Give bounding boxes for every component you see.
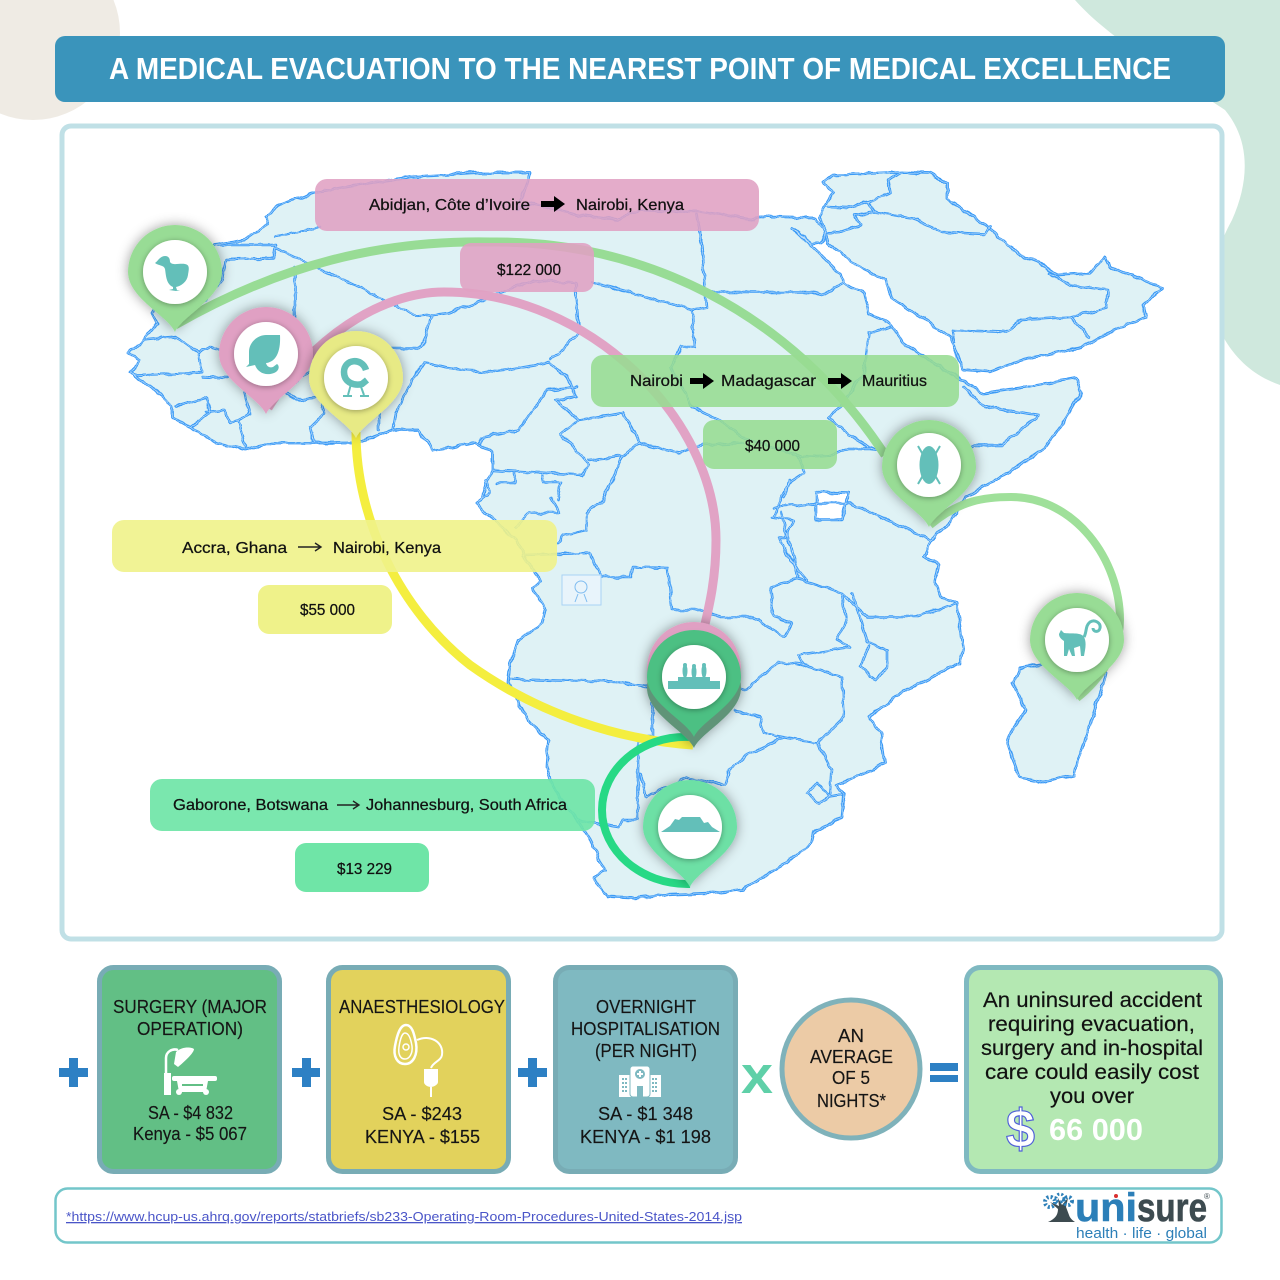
panel: total cost: surgery and in-hospital — [981, 1037, 1203, 1060]
footer panel — [56, 1186, 1222, 1242]
equals sign — [930, 1063, 958, 1082]
plus sign — [518, 1058, 547, 1087]
logo: unisure: sure — [1137, 1186, 1207, 1230]
panel: surgery: SURGERY (MAJOR — [113, 997, 267, 1017]
label: $122 000 — [460, 243, 594, 292]
label: $40 000 — [703, 420, 837, 469]
icon: elephant — [246, 335, 280, 374]
label: Accra route — [112, 520, 557, 572]
route arc: yellow Accra to Nairobi — [356, 432, 693, 745]
label: Gaborone route: Johannesburg, South Africa — [366, 797, 567, 814]
pin: table mountain — [643, 780, 737, 887]
pin: dodo — [128, 225, 222, 332]
icon: dodo — [155, 256, 189, 291]
route arc: green Gaborone to Johannesburg — [602, 737, 690, 884]
panel: surgery: SA - $4 832 — [148, 1103, 233, 1123]
panel: anaesthesiology: SA - $243 — [382, 1104, 462, 1124]
pin: shield beetle — [882, 420, 976, 527]
panel: overnight hospitalisation: SA - $1 348 — [598, 1104, 693, 1124]
panel: total cost: requiring evacuation, — [988, 1013, 1195, 1036]
map of Africa and Arabia — [129, 172, 1163, 898]
label: Nairobi Madagascar Mauritius route: Nairobi — [630, 373, 683, 390]
icon: shield — [918, 446, 940, 484]
panel: anaesthesiology: ANAESTHESIOLOGY — [339, 997, 505, 1017]
label: $55 000 — [258, 585, 392, 634]
panel: overnight hospitalisation: HOSPITALISATION — [571, 1019, 720, 1039]
label: Nairobi Madagascar Mauritius route — [591, 355, 959, 407]
decorative blob: top left — [0, 0, 120, 120]
label: Gaborone route: Gaborone, Botswana — [173, 797, 328, 814]
panel: surgery: OPERATION) — [137, 1019, 243, 1039]
icon: monument — [668, 663, 720, 689]
panel: surgery: Kenya - $5 067 — [133, 1124, 247, 1144]
logo: unisure: ® — [1204, 1192, 1210, 1201]
logo: unisure — [1045, 1186, 1210, 1242]
label: $13 229 — [295, 843, 429, 892]
total amount: 66 000 — [1049, 1112, 1143, 1147]
label: $13 229: $13 229 — [337, 861, 392, 878]
panel: total cost: care could easily cost — [985, 1061, 1199, 1084]
panel: overnight hospitalisation: KENYA - $1 198 — [580, 1127, 711, 1147]
panel: total cost: you over — [1050, 1085, 1134, 1108]
pin: elephant — [219, 307, 313, 414]
label: Abidjan route: Abidjan, Côte d’Ivoire — [369, 197, 530, 214]
pin: sankofa bird — [309, 331, 403, 438]
icon: anaesthesia mask — [394, 1025, 442, 1097]
icon: tree — [1045, 1194, 1075, 1222]
label: $40 000: $40 000 — [745, 438, 800, 455]
label: Nairobi Madagascar Mauritius route: Mauritius — [862, 373, 927, 390]
label: Nairobi Madagascar Mauritius route: Madagascar — [721, 373, 817, 390]
plus sign — [292, 1058, 320, 1087]
label: Abidjan route: Nairobi, Kenya — [576, 197, 684, 214]
icon: sankofa bird — [343, 361, 369, 396]
circle: average of 5 nights: AN — [838, 1026, 864, 1046]
panel: overnight hospitalisation: OVERNIGHT — [596, 997, 696, 1017]
title banner — [55, 36, 1225, 102]
icon: lemur — [1059, 621, 1100, 656]
logo: unisure: health · life · global — [1076, 1225, 1207, 1242]
route arc: green Nairobi to Madagascar — [175, 242, 885, 455]
circle: average of 5 nights: AVERAGE — [810, 1047, 893, 1067]
logo: unisure: uni — [1075, 1186, 1137, 1230]
panel: map — [62, 126, 1222, 939]
faint bird icon box — [562, 575, 601, 605]
plus sign — [59, 1058, 88, 1087]
icon: dollar: $ — [1006, 1099, 1035, 1159]
arrow — [828, 373, 852, 389]
label: Accra route: Accra, Ghana — [182, 540, 287, 557]
panel: anaesthesiology: KENYA - $155 — [365, 1127, 480, 1147]
circle: average of 5 nights: OF 5 — [832, 1068, 870, 1088]
circle: average of 5 nights: NIGHTS* — [817, 1091, 886, 1111]
pin: lemur — [1030, 593, 1124, 700]
circle: average of 5 nights — [782, 1000, 920, 1138]
route arc: green Madagascar to Mauritius — [930, 497, 1120, 698]
panel: overnight hospitalisation — [556, 968, 736, 1172]
panel: total cost: An uninsured accident — [983, 989, 1202, 1012]
arrow — [337, 801, 359, 809]
title: A MEDICAL EVACUATION TO THE NEAREST POINT OF MEDICAL EXCELLENCE — [109, 51, 1171, 86]
decorative blob: right — [1075, 0, 1280, 385]
pin: Nairobi destination — [647, 622, 741, 748]
arrow — [690, 373, 714, 389]
arrow — [298, 543, 321, 551]
label: Accra route: Nairobi, Kenya — [333, 540, 441, 557]
label: Gaborone route — [150, 779, 595, 831]
arrow — [541, 196, 565, 212]
icon: operating lamp and table — [164, 1047, 217, 1095]
label: $55 000: $55 000 — [300, 602, 355, 619]
route arc: pink Abidjan to Nairobi — [268, 292, 716, 660]
label: Abidjan route — [315, 179, 759, 231]
icon: hospital — [619, 1066, 661, 1097]
source link: *https://www.hcup-us.ahrq.gov/reports/statbriefs/sb233-Operating-Room-Procedures-United-States-2014.jsp — [66, 1209, 742, 1224]
multiply sign: x — [741, 1046, 774, 1105]
icon: table mountain — [661, 817, 720, 832]
panel: anaesthesiology — [328, 968, 508, 1172]
panel: overnight hospitalisation: (PER NIGHT) — [595, 1041, 697, 1061]
panel: total cost — [966, 968, 1220, 1172]
panel: surgery — [100, 968, 280, 1172]
label: $122 000: $122 000 — [497, 262, 561, 279]
